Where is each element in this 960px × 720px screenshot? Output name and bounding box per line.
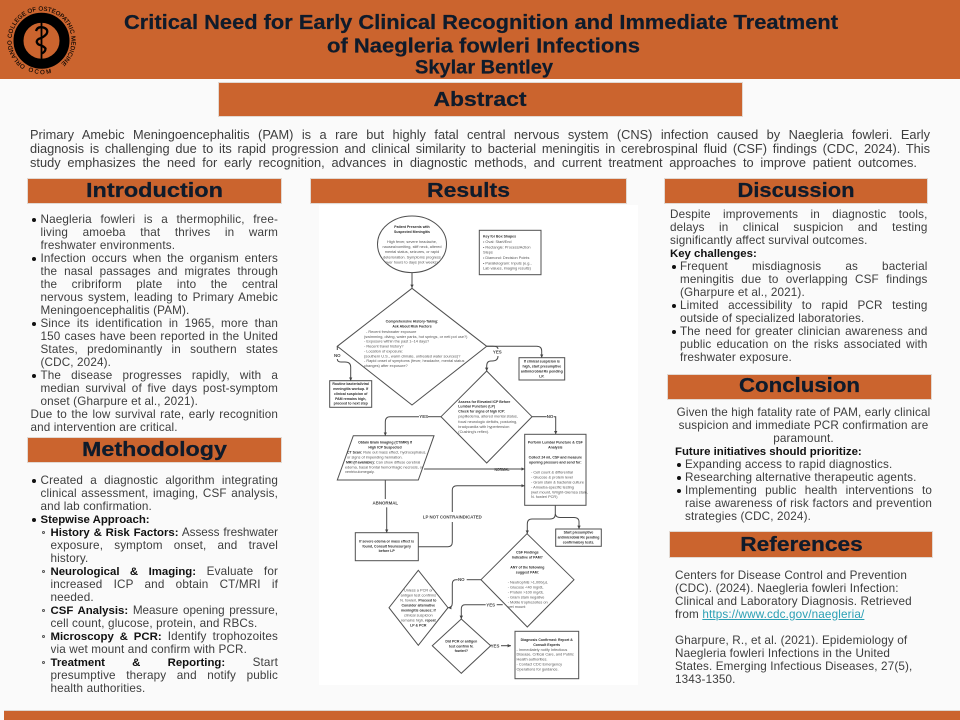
flowchart connectors: [337, 273, 579, 646]
introduction text: onset (Gharpure et al., 2021).: [40, 395, 198, 408]
decision: alternative causes: [389, 570, 448, 645]
conclusion text: strategies (CDC, 2024).: [685, 510, 811, 523]
methodology text: presumptive therapy and notify public: [50, 669, 278, 682]
introduction text: freshwater environments.: [40, 239, 175, 252]
conclusion text: Implementing public health interventions to: [685, 484, 932, 497]
decision: history taking: [337, 288, 487, 405]
input: brain imaging: Obtain Brain Imaging (CT/MRI) If: [358, 441, 413, 445]
box: presumptive therapy if high suspicion: [519, 358, 565, 380]
box: presumptive therapy if high suspicion: LP.: [539, 374, 544, 378]
methodology text: via wet mount and confirm with PCR.: [50, 643, 247, 656]
box: presumptive therapy if high suspicion: high, start presumptive: [522, 364, 561, 368]
introduction text: [30, 212, 278, 434]
conclusion text: Researching alternative therapeutic agents.: [685, 471, 916, 484]
decision: CSF findings: [481, 534, 574, 627]
box: routine meningitis workup: meningitis workup. If: [333, 387, 369, 391]
legend: key for box shapes: • Diamond: Decision Points: [483, 256, 530, 260]
box: lumbar puncture and CSF analysis: Perform Lumbar Puncture & CSF: [528, 441, 584, 445]
box: consult neurosurgery: [355, 533, 418, 561]
input: brain imaging: [337, 436, 434, 480]
introduction text: States, predominantly in southern states: [40, 343, 278, 356]
decision: PCR or antigen confirmation: fowleri?: [455, 649, 468, 653]
flowchart branch labels: LP NOT CONTRAINDICATED: [423, 515, 482, 520]
start oval: patient presents: mental status, seizures, or rapid: [385, 250, 439, 254]
decision: elevated ICP: [441, 371, 532, 463]
legend: key for box shapes: Steps: [483, 251, 493, 255]
start oval: patient presents: over hours to days (not weeks).: [385, 260, 439, 264]
box: lumbar puncture and CSF analysis: - Gram stain & bacterial culture: [531, 480, 584, 484]
references list: from https://www.cdc.gov/naegleria/: [675, 608, 864, 621]
heading: Methodology: Methodology: [82, 438, 228, 461]
title and author: of Naegleria fowleri Infections: [327, 34, 640, 58]
box: lumbar puncture and CSF analysis: opening pressure and send for:: [529, 461, 582, 465]
box: diagnosis confirmed: [515, 631, 579, 679]
heading: Conclusion: [668, 375, 931, 399]
header banner: [0, 0, 960, 78]
introduction text: and intervention are critical.: [30, 421, 178, 434]
box: start presumptive antimicrobial: [556, 529, 601, 546]
decision: alternative causes: LP & PCR: [410, 623, 427, 627]
discussion text: [670, 208, 928, 364]
legend: key for box shapes: • Oval: Start/End: [483, 240, 511, 244]
introduction text: Due to the low survival rate, early recognition: [30, 408, 278, 421]
introduction text: 150 cases have been reported in the United: [40, 330, 278, 343]
methodology text: Neurological & Imaging: Evaluate for: [50, 565, 278, 578]
box: lumbar puncture and CSF analysis: - Amoeba-specific testing: [531, 485, 574, 489]
methodology text: cell count, glucose, protein, and RBCs.: [50, 617, 257, 630]
input: brain imaging: High ICP Suspected: [368, 445, 402, 449]
discussion text: Despite improvements in diagnostic tools,: [670, 208, 928, 220]
discussion text: significantly affect survival outcomes.: [670, 234, 868, 247]
methodology text: history.: [50, 552, 88, 565]
input: brain imaging: MRI (if available): Can show diffuse cerebral: [346, 460, 420, 464]
start oval: patient presents: nausea/vomiting, stiff neck, altered: [382, 245, 442, 249]
flowchart branch labels: NORMAL: [494, 467, 510, 472]
discussion text: Key challenges:: [670, 248, 757, 260]
legend: key for box shapes: • Rectangle: Process/Action: [483, 245, 530, 249]
decision: history taking: changes) after exposure?: [364, 364, 408, 368]
discussion text: public education on the risks associated with: [680, 338, 928, 351]
decision: history taking: (swimming, diving, water parks, hot springs, or neti pot use?): [364, 335, 468, 339]
start oval: patient presents: High fever, severe headache,: [387, 240, 437, 244]
footer band: [4, 711, 960, 720]
decision: CSF findings: - Glucose <40 mg/dL: [508, 586, 544, 590]
heading: Methodology: [28, 438, 281, 462]
logo: Orlando College of Osteopathic Medicine seal: OCOM: [28, 68, 52, 74]
conclusion text: Expanding access to rapid diagnostics.: [685, 458, 892, 471]
methodology text: Stepwise Approach:: [40, 514, 150, 526]
introduction text: Infection occurs when the organism enters: [40, 252, 278, 265]
discussion text: The need for greater clinician awareness and: [680, 325, 928, 338]
box: routine meningitis workup: clinical suspicion of: [334, 392, 368, 396]
decision: alternative causes: Unless a PCR or: [404, 589, 433, 593]
references list: Clinical and Laboratory Diagnosis. Retrieved: [675, 595, 912, 608]
decision: elevated ICP: Assess for Elevated ICP Before: [458, 400, 510, 404]
introduction text: living amoeba that thrives in warm: [40, 226, 278, 239]
start oval: patient presents: deterioration. Symptoms progress: [383, 255, 441, 259]
decision: alternative causes: meningitis causes; if: [401, 609, 436, 613]
start oval: patient presents: Suspected Meningitis: [394, 230, 430, 234]
methodology text: CSF Analysis: Measure opening pressure,: [50, 604, 278, 617]
introduction text: Since its identification in 1965, more than: [40, 317, 278, 330]
box: diagnosis confirmed: - Contact CDC Emergency: [516, 663, 562, 667]
methodology text: needed.: [50, 591, 94, 604]
decision: CSF findings: - Neutrophils >1,000/µL: [508, 580, 549, 584]
methodology text: Microscopy & PCR: Identify trophozoites: [50, 630, 278, 643]
decision: history taking: Ask About Risk Factors: [392, 325, 432, 329]
box: diagnosis confirmed: Disease, Critical Care, and Public: [516, 653, 574, 657]
flowchart branch labels: ABNORMAL: [372, 501, 398, 506]
references list: (CDC). (2024). Naegleria fowleri Infection:: [675, 582, 899, 595]
flowchart branch labels: YES: [486, 602, 495, 607]
box: diagnosis confirmed: - Immediately notify Infectious: [516, 648, 567, 652]
title and author: Critical Need for Early Clinical Recognition and Immediate Treatment: [124, 11, 838, 34]
heading: Discussion: Discussion: [738, 179, 854, 202]
box: lumbar puncture and CSF analysis: [525, 434, 588, 505]
flowchart branch labels: NO: [547, 414, 554, 419]
decision: elevated ICP: (Cushing's reflex).: [458, 430, 489, 434]
box: lumbar puncture and CSF analysis: - Glucose & protein level: [531, 475, 573, 479]
box: lumbar puncture and CSF analysis: - Cell count & differential: [531, 470, 573, 474]
box: lumbar puncture and CSF analysis: Analysis: [548, 446, 563, 450]
conclusion text: paramount.: [773, 432, 834, 445]
references list: Gharpure, R., et al. (2021). Epidemiology of: [675, 634, 907, 647]
references list: Centers for Disease Control and Prevention: [675, 568, 907, 582]
box: lumbar puncture and CSF analysis: Collect 24 mL CSF and measure: [529, 456, 582, 460]
start oval: patient presents: Patient Presents with: [394, 225, 430, 229]
decision: history taking: - Exposure within the past 1–14 days?: [364, 340, 429, 344]
decision: CSF findings: suggest PAM:: [516, 571, 539, 575]
conclusion text: [675, 406, 932, 523]
box: start presumptive antimicrobial: antimicrobial Rx pending: [558, 536, 599, 540]
discussion text: outside of specialized laboratories.: [680, 312, 864, 325]
flowchart branch labels: NO: [334, 353, 341, 358]
abstract text: [30, 128, 930, 170]
discussion text: meningitis due to overlapping CSF findings: [680, 273, 928, 286]
decision: history taking: - Recent travel history?: [364, 344, 404, 348]
heading: Abstract: Abstract: [434, 88, 527, 111]
decision: PCR or antigen confirmation: [432, 619, 491, 673]
methodology text: History & Risk Factors: Assess freshwater: [50, 526, 278, 539]
discussion text: Limited accessibility to rapid PCR testing: [680, 299, 928, 312]
decision: history taking: - Location of exposure:: [364, 349, 403, 353]
methodology text: and lab confirmation.: [40, 500, 152, 513]
conclusion text: raise awareness of risk factors and prevention: [685, 497, 932, 510]
box: routine meningitis workup: PAM remains high,: [335, 397, 366, 401]
decision: PCR or antigen confirmation: Did PCR or antigen: [445, 639, 477, 643]
heading: Conclusion: Conclusion: [739, 374, 860, 397]
input: brain imaging: or signs of impending herniation.: [347, 455, 403, 459]
box: presumptive therapy if high suspicion: antimicrobial Rx pending: [521, 369, 563, 373]
panel: diagnostic flowchart: [319, 205, 638, 685]
title and author: Skylar Bentley: [415, 58, 553, 78]
methodology text: Treatment & Reporting: Start: [50, 656, 278, 669]
decision: history taking: (southern U.S., warm climate, untreated water sources)?: [364, 354, 460, 358]
box: lumbar puncture and CSF analysis: (wet mount, Wright-Giemsa stain,: [531, 490, 588, 494]
box: diagnosis confirmed: Operations for guidance.: [516, 667, 559, 671]
decision: history taking: - Recent freshwater exposure: [366, 330, 416, 334]
input: brain imaging: ventriculomegaly.: [345, 470, 375, 474]
heading: Abstract: [219, 83, 742, 116]
decision: CSF findings: - Motile trophozoites on: [508, 600, 548, 604]
decision: elevated ICP: Lumbar Puncture (LP): [458, 405, 495, 409]
box: consult neurosurgery: found, Consult Neurosurgery: [362, 544, 411, 548]
decision: history taking: - Rapid onset of symptoms (fever, headache, mental status: [364, 359, 464, 363]
box: routine meningitis workup: [330, 381, 372, 407]
methodology text: increased ICP and obtain CT/MRI if: [50, 578, 278, 591]
decision: alternative causes: antigen test confirms: [401, 593, 436, 597]
box: routine meningitis workup: proceed to next step: [334, 402, 368, 406]
box: presumptive therapy if high suspicion: If clinical suspicion is: [524, 359, 560, 363]
legend: key for box shapes: Lab values, imaging results): [483, 267, 532, 271]
introduction text: Meningoencephalitis (PAM).: [40, 304, 189, 317]
box: start presumptive antimicrobial: Start presumptive: [564, 531, 593, 535]
flowchart branch labels: YES: [493, 350, 502, 355]
discussion text: freshwater exposure.: [680, 351, 792, 364]
decision: alternative causes: N. fowleri, Proceed to: [400, 598, 436, 602]
decision: CSF findings: - Protein >100 mg/dL: [508, 591, 545, 595]
decision: CSF findings: wet mount: [508, 605, 526, 609]
heading: Discussion: [665, 179, 927, 203]
decision: CSF findings: Indicative of PAM?: [512, 556, 543, 560]
methodology text: [32, 474, 278, 695]
methodology text: clinical assessment, imaging, CSF analysis,: [40, 487, 278, 500]
conclusion text: suspicion and immediate PCR confirmation are: [679, 419, 928, 432]
decision: CSF findings: CSF Findings: [516, 551, 539, 555]
introduction text: Naegleria fowleri is a thermophilic, free-: [40, 212, 278, 226]
introduction text: (CDC, 2024).: [40, 356, 111, 369]
introduction text: The disease progresses rapidly, with a: [40, 369, 278, 382]
logo: Orlando College of Osteopathic Medicine seal: ORLANDO COLLEGE OF OSTEOPATHIC MEDICINE: [7, 6, 76, 69]
box: diagnosis confirmed: Health authorities.: [516, 658, 547, 662]
input: brain imaging: CT Scan: Rule out mass effect, hydrocephalus,: [347, 450, 426, 454]
heading: Introduction: [28, 179, 281, 203]
references list: 1343-1350.: [675, 673, 736, 686]
flowchart branch labels: YES: [491, 643, 499, 648]
introduction text: the cribriform plate into the central: [40, 278, 278, 291]
start oval: patient presents: [378, 216, 446, 273]
flowchart branch labels: [334, 350, 554, 648]
heading: Results: [311, 179, 626, 203]
box: start presumptive antimicrobial: confirmatory tests.: [563, 541, 594, 545]
box: lumbar puncture and CSF analysis: N. fowleri PCR): [531, 495, 558, 499]
methodology text: exposure, symptom onset, and travel: [50, 539, 278, 552]
discussion text: (Gharpure et al., 2021).: [680, 286, 805, 299]
methodology text: Created a diagnostic algorithm integrating: [40, 474, 278, 487]
decision: alternative causes: Consider alternative: [401, 604, 435, 608]
box: routine meningitis workup: Routine bacterial/viral: [332, 382, 369, 386]
decision: elevated ICP: Check for signs of high ICP:: [458, 410, 505, 414]
heading: References: [670, 532, 932, 557]
heading: Introduction: Introduction: [86, 179, 223, 202]
conclusion text: Given the high fatality rate of PAM, early clinical: [677, 406, 930, 418]
legend: key for box shapes: Key for Box Shapes: [483, 235, 516, 239]
box: diagnosis confirmed: Consult Experts: [533, 643, 560, 647]
decision: alternative causes: remains high, repeat: [401, 618, 436, 622]
flowchart branch labels: YES: [419, 414, 428, 419]
conclusion text: Future initiatives should prioritize:: [675, 446, 862, 458]
references list: States. Emerging Infectious Diseases, 27(5),: [675, 660, 912, 673]
box: consult neurosurgery: before LP: [379, 549, 395, 553]
decision: elevated ICP: bradycardia with hypertension: [458, 425, 509, 429]
introduction text: nervous system, leading to Primary Amebic: [40, 291, 278, 304]
legend: key for box shapes: [479, 230, 541, 275]
flowchart branch labels: NO: [458, 577, 465, 582]
title and author: [124, 11, 838, 78]
decision: elevated ICP: focal neurologic deficits, posturing,: [458, 420, 517, 424]
heading: References: References: [740, 533, 862, 556]
decision: elevated ICP: papilledema, altered mental status,: [458, 415, 518, 419]
discussion text: Frequent misdiagnosis as bacterial: [680, 260, 928, 273]
decision: CSF findings: - Gram stain negative: [508, 595, 544, 599]
introduction text: median survival of five days post-symptom: [40, 382, 278, 395]
input: brain imaging: edema, basal frontal hemorrhagic necrosis, or: [345, 465, 424, 469]
references list: [675, 568, 912, 686]
legend: key for box shapes: • Parallelogram: Inputs (e.g.,: [483, 261, 532, 265]
box: diagnosis confirmed: Diagnosis Confirmed: Report &: [521, 638, 573, 642]
decision: PCR or antigen confirmation: test confirm N.: [449, 644, 474, 648]
heading: Results: Results: [427, 179, 510, 202]
box: consult neurosurgery: If severe edema or mass effect is: [359, 539, 414, 543]
references list: Naegleria fowleri Infections in the United: [675, 647, 890, 660]
discussion text: delays in clinical suspicion and testing: [670, 221, 928, 234]
decision: alternative causes: clinical suspicion: [404, 614, 433, 618]
decision: CSF findings: ANY of the following: [510, 566, 544, 570]
decision: history taking: Comprehensive History-Taking:: [386, 320, 438, 324]
methodology text: health authorities.: [50, 682, 145, 695]
introduction text: the nasal passages and migrates through: [40, 265, 278, 278]
